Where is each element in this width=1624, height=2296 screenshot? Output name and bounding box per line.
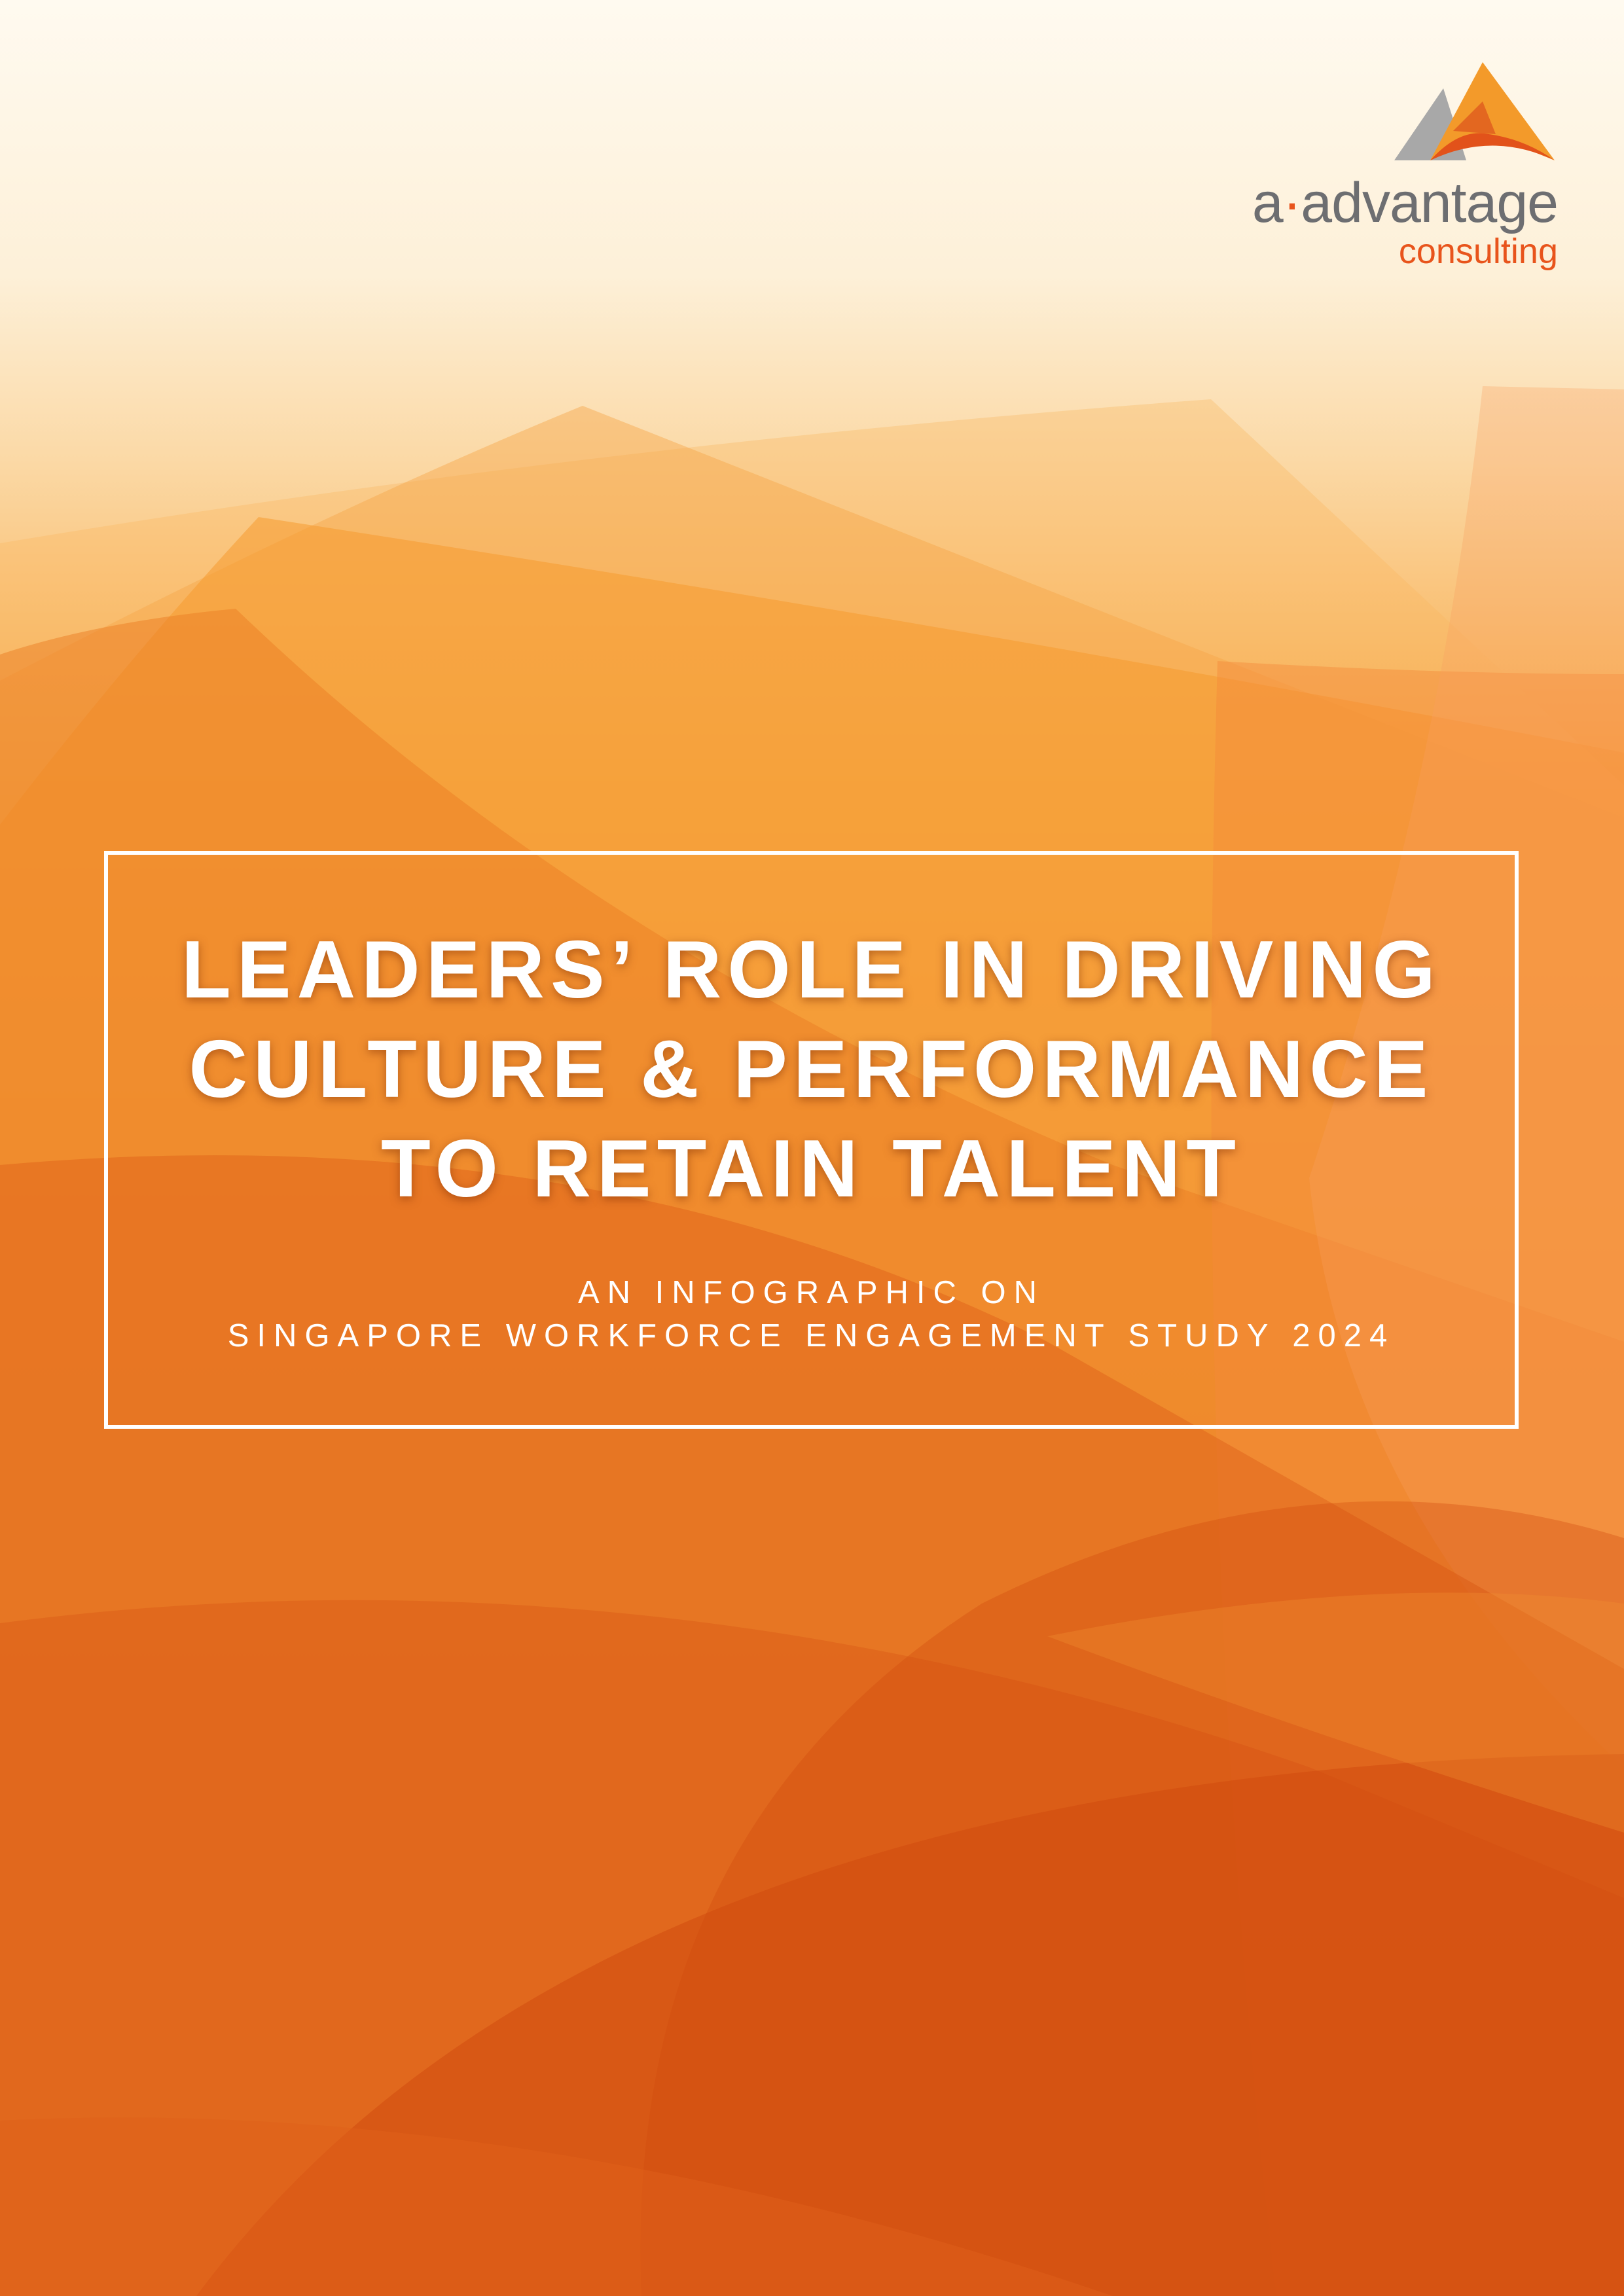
icon: triangles — [1394, 62, 1555, 160]
subtitle: AN INFOGRAPHIC ON — [578, 1275, 1045, 1310]
title: CULTURE & PERFORMANCE — [189, 1024, 1434, 1115]
logo: a-advantage consulting — [1252, 62, 1558, 271]
logo: a-advantage consulting: consulting — [1399, 232, 1558, 271]
title box — [104, 851, 1519, 1429]
logo text: a·advantage — [1252, 171, 1558, 234]
subtitle: SINGAPORE WORKFORCE ENGAGEMENT STUDY 2024 — [228, 1318, 1395, 1354]
title: TO RETAIN TALENT — [381, 1124, 1242, 1214]
title: LEADERS’ ROLE IN DRIVING — [181, 925, 1441, 1015]
title — [181, 925, 1441, 1214]
subtitle — [228, 1275, 1395, 1354]
